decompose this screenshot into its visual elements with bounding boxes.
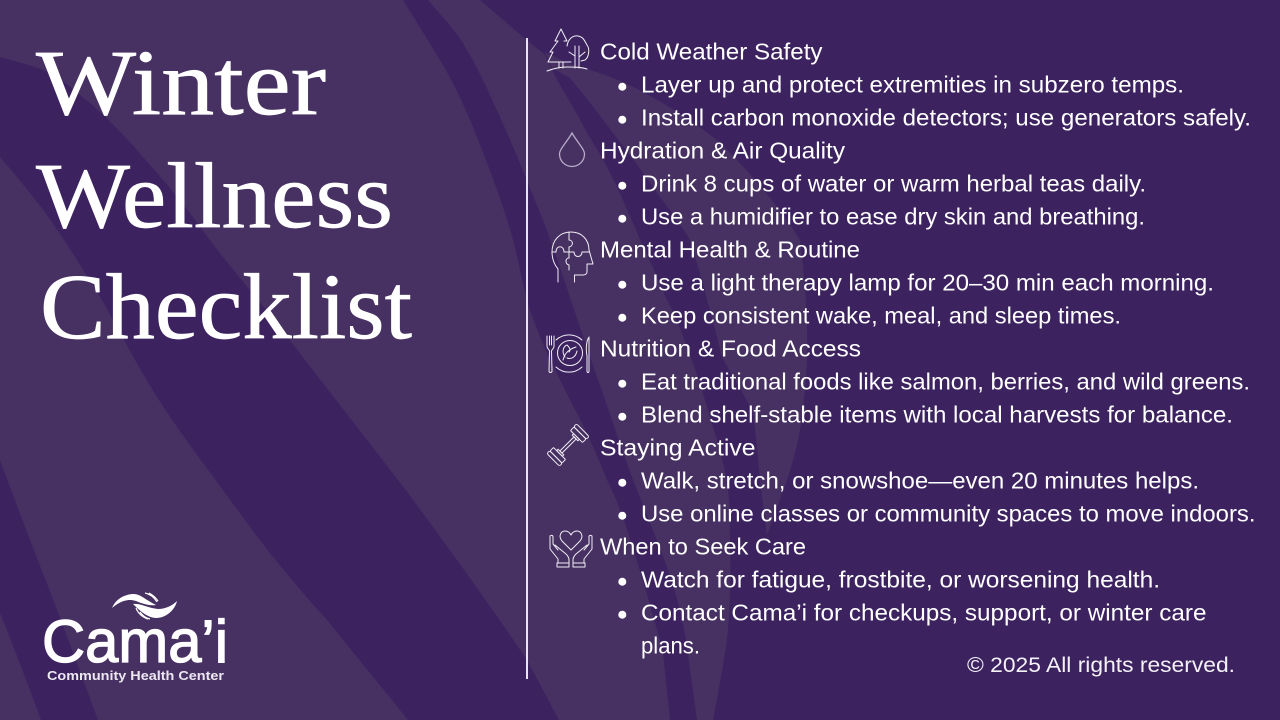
icon: head with puzzle: [552, 232, 593, 282]
icon: dumbbell: [547, 424, 589, 466]
title: Winter: [36, 32, 326, 135]
item: humidifier: Use a humidifier to ease dry skin and breathing.: [641, 204, 1145, 230]
item: traditional foods: Eat traditional foods like salmon, berries, and wild greens.: [641, 369, 1250, 395]
item: watch for: Watch for fatigue, frostbite, or worsening health.: [641, 567, 1160, 593]
item: contact: Contact Cama’i for checkups, support, or winter care: [641, 600, 1206, 626]
icon: plate with leaf: [547, 335, 589, 372]
item: light therapy: Use a light therapy lamp for 20–30 min each morning.: [641, 270, 1214, 296]
item: contact: [618, 600, 1206, 659]
icon: trees: [547, 29, 589, 71]
item: online classes: Use online classes or community spaces to move indoors.: [641, 501, 1256, 527]
item: consistent times: Keep consistent wake, meal, and sleep times.: [641, 303, 1121, 329]
title: Wellness: [36, 145, 393, 248]
copyright: © 2025 All rights reserved.: [967, 654, 1235, 677]
item: shelf-stable: Blend shelf-stable items with local harvests for balance.: [641, 402, 1233, 428]
heading: nutrition: Nutrition & Food Access: [600, 336, 861, 362]
panel: checklist: [547, 29, 1256, 659]
icon: hands holding heart: [550, 531, 592, 567]
heading: cold weather safety: Cold Weather Safety: [600, 39, 823, 65]
heading: hydration: Hydration & Air Quality: [600, 138, 845, 164]
heading: mental health: Mental Health & Routine: [600, 237, 860, 263]
item: drink water: Drink 8 cups of water or warm herbal teas daily.: [641, 171, 1146, 197]
title: Checklist: [40, 256, 412, 359]
item: contact: plans.: [641, 633, 700, 659]
heading: staying active: Staying Active: [600, 435, 756, 461]
icon: water drop: [560, 133, 584, 166]
logo: Cama'i Community Health Center: Cama’i: [42, 608, 228, 675]
item: carbon monoxide: Install carbon monoxide detectors; use generators safely.: [641, 105, 1251, 131]
item: walk: Walk, stretch, or snowshoe—even 20 minutes helps.: [641, 468, 1199, 494]
item: layer up: Layer up and protect extremities in subzero temps.: [641, 72, 1184, 98]
logo: Cama'i Community Health Center: Community Health Center: [47, 669, 224, 683]
heading: when to seek care: When to Seek Care: [600, 534, 806, 560]
title: [36, 32, 412, 359]
